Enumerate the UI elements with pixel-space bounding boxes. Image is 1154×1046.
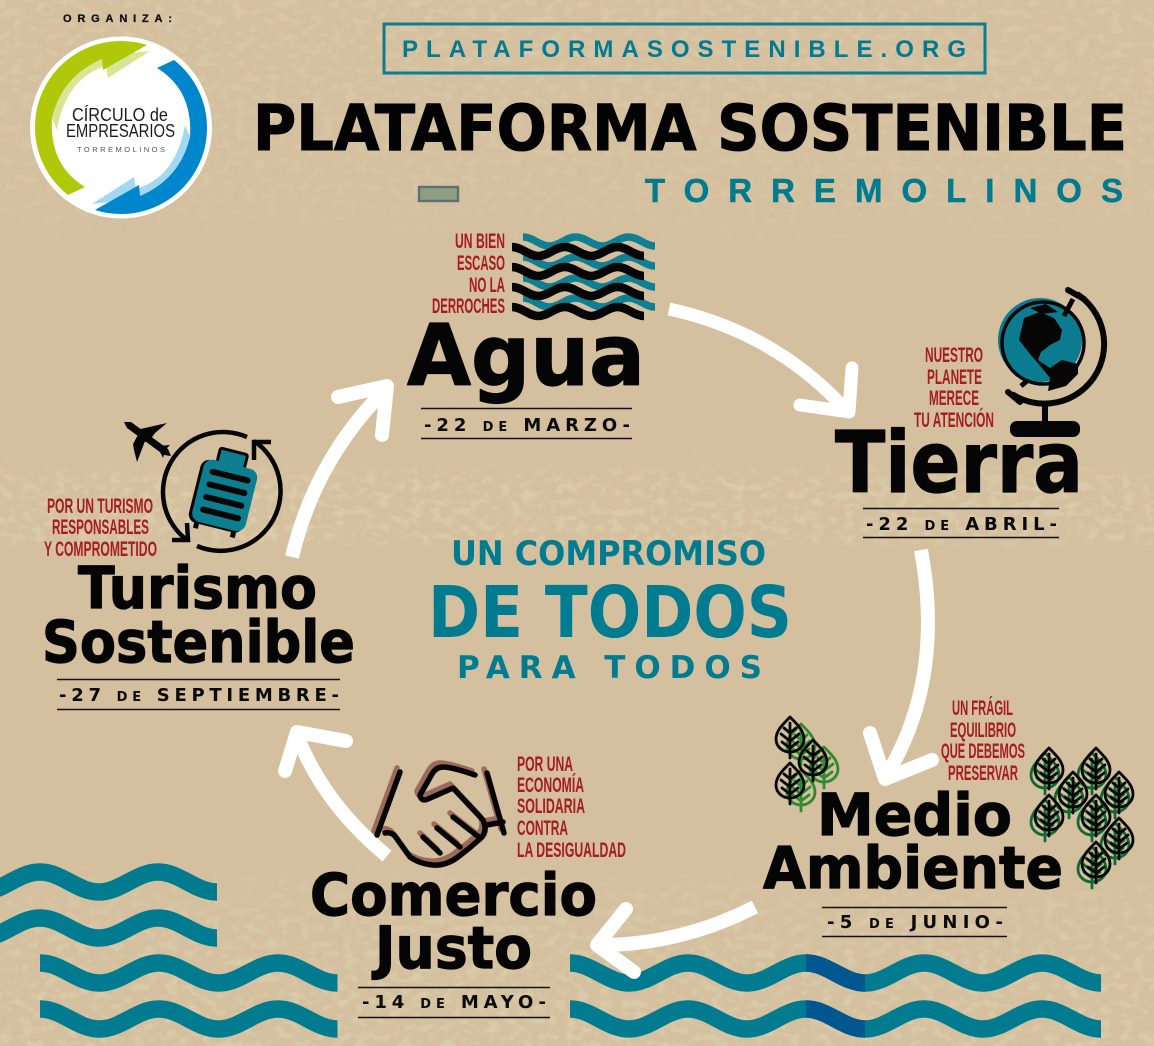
- panel: Medio Ambiente: [763, 697, 1133, 936]
- tagline: UN BIEN: [455, 230, 505, 253]
- tagline: [914, 344, 994, 432]
- date: -27 DE SEPTIEMBRE-: [59, 685, 339, 706]
- small placeholder box: [419, 187, 458, 201]
- heading: Turismo: [78, 554, 317, 622]
- tagline: ESCASO: [457, 252, 505, 275]
- tagline: TU ATENCIÓN: [914, 408, 994, 432]
- heading: [763, 781, 1063, 902]
- tagline: EQUILIBRIO: [950, 719, 1016, 742]
- heading: Justo: [371, 914, 532, 982]
- tagline: CONTRA: [517, 817, 568, 840]
- organiser label: ORGANIZA:: [63, 13, 172, 25]
- arrow: Turismo to Agua: [292, 386, 387, 557]
- tagline: [941, 697, 1025, 785]
- tagline: [517, 753, 626, 862]
- tagline: PRESERVAR: [948, 762, 1018, 785]
- date: -5 DE JUNIO-: [827, 912, 1003, 933]
- icon: water waves: [512, 237, 655, 316]
- central message: DE TODOS: [428, 571, 792, 654]
- central message: [428, 534, 792, 686]
- icon: airplane: [124, 422, 171, 462]
- logo blue arrow: [92, 60, 207, 214]
- logo: Círculo de Empresarios: [30, 36, 212, 218]
- heading: [42, 554, 355, 676]
- logo green arrow: [35, 41, 150, 195]
- tagline: NO LA: [469, 274, 505, 297]
- heading: Comercio: [310, 861, 597, 929]
- tagline: SOLIDARIA: [517, 795, 585, 818]
- tagline: NUESTRO: [925, 344, 983, 367]
- icon: recycling arrows: [163, 432, 281, 551]
- icon: leaves left: [776, 717, 838, 811]
- tagline: PLANETE: [927, 366, 982, 389]
- tagline: DERROCHES: [432, 295, 505, 318]
- arrow: Medio Ambiente to Comercio Justo: [597, 907, 755, 972]
- heading: Sostenible: [42, 608, 355, 676]
- subtitle: TORREMOLINOS: [645, 172, 1123, 209]
- logo wordmark: [66, 105, 175, 154]
- tagline: LA DESIGUALDAD: [517, 839, 626, 862]
- decorative bottom waves right: [570, 963, 1101, 1029]
- date: [421, 408, 632, 438]
- logo wordmark: CÍRCULO de: [72, 105, 168, 125]
- date: -22 DE MARZO-: [424, 415, 630, 436]
- arrow: Tierra to Medio Ambiente: [870, 550, 932, 779]
- panel: Agua: [407, 230, 655, 438]
- panel: Tierra: [835, 290, 1104, 538]
- date: -14 DE MAYO-: [362, 992, 546, 1013]
- panel: Turismo Sostenible: [42, 422, 355, 710]
- tagline: POR UNA: [517, 753, 573, 776]
- arrow: Agua to Tierra: [669, 309, 852, 412]
- heading: [310, 861, 597, 982]
- heading: Ambiente: [763, 834, 1063, 902]
- tagline: POR UN TURISMO: [47, 495, 153, 518]
- date: -22 DE ABRIL-: [866, 514, 1057, 535]
- tagline: UN FRÁGIL: [952, 697, 1013, 720]
- arrow: Comercio Justo to Turismo: [285, 732, 387, 856]
- icon: leaves right: [1031, 748, 1133, 888]
- date: [57, 680, 340, 710]
- tagline: MERECE: [929, 387, 979, 410]
- panel: Comercio Justo: [310, 753, 626, 1018]
- icon: handshake: [374, 763, 504, 865]
- logo wordmark: EMPRESARIOS: [66, 121, 175, 141]
- heading: Medio: [817, 781, 1012, 849]
- decorative bottom waves left: [0, 872, 338, 1029]
- tagline: Y COMPROMETIDO: [44, 538, 157, 561]
- icon: suitcase: [186, 444, 262, 540]
- date: [822, 908, 1007, 936]
- heading: Agua: [407, 307, 645, 406]
- tagline: [44, 495, 157, 561]
- tagline: ECONOMÍA: [517, 774, 584, 797]
- tagline: RESPONSABLES: [52, 516, 149, 539]
- website box: [384, 24, 985, 73]
- icon: globe: [998, 290, 1104, 437]
- tagline: [432, 230, 505, 318]
- central message: PARA TODOS: [457, 650, 762, 686]
- heading: Tierra: [835, 414, 1083, 513]
- central message: UN COMPROMISO: [451, 534, 766, 574]
- tagline: QUE DEBEMOS: [941, 740, 1025, 763]
- logo wordmark: TORREMOLINOS: [77, 145, 165, 154]
- website box: PLATAFORMASOSTENIBLE.ORG: [402, 36, 966, 63]
- date: [358, 988, 550, 1018]
